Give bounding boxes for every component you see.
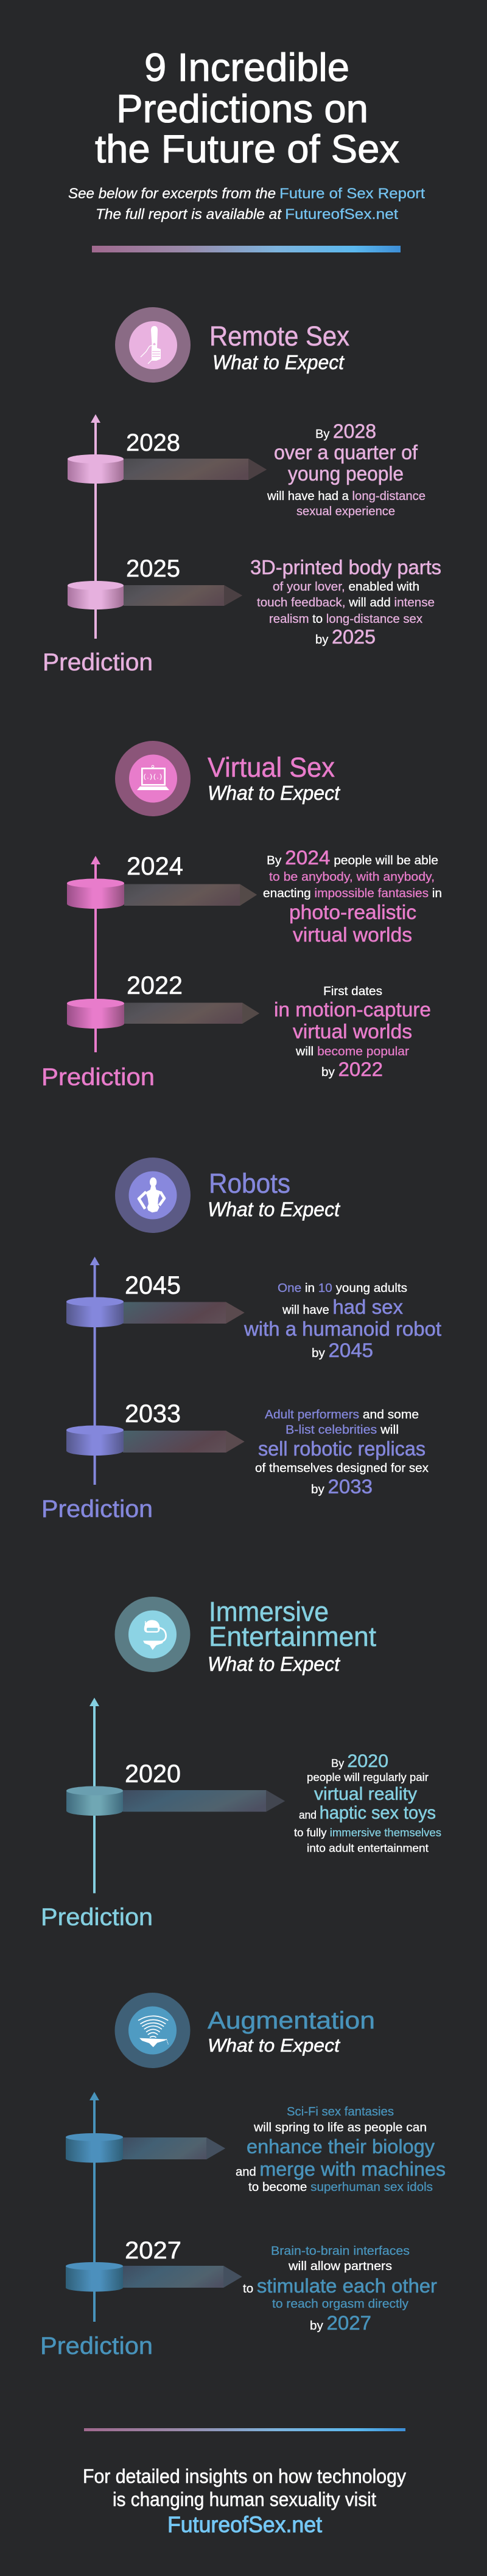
text block: 2020 prediction: to fully immersive themselves	[294, 1827, 441, 1839]
heading: augmentation: Augmentation	[208, 2007, 375, 2034]
title: Predictions on	[116, 86, 368, 131]
panel: immersive entertainment	[41, 1596, 441, 1931]
intro text: Future of Sex Report	[279, 186, 425, 202]
subheading: What to Expect	[212, 351, 345, 373]
text block: 2028 prediction: over a quarter of	[274, 441, 418, 463]
text block: 2045 prediction	[244, 1282, 441, 1361]
text block: 2027 prediction: to stimulate each other	[243, 2275, 437, 2297]
icon: laptop	[115, 741, 191, 816]
intro text: FutureofSex.net	[285, 206, 398, 223]
text block: 2033 prediction: of themselves designed for sex	[255, 1462, 429, 1475]
panel: augmentation	[40, 1993, 446, 2359]
subheading: What to Expect	[208, 782, 341, 804]
marker: 2024: 2024	[127, 852, 183, 880]
marker: 2045	[66, 1271, 245, 1327]
text block: 2020 prediction: and haptic sex toys	[299, 1803, 436, 1823]
arrow: timeline axis	[91, 414, 100, 639]
marker: 2027: 2027	[125, 2237, 181, 2264]
heading: immersive entertainment	[209, 1596, 376, 1652]
title: 9 Incredible	[144, 45, 349, 89]
text block: 2025 prediction: touch feedback, will add intense	[257, 596, 435, 609]
text block: 2025 prediction	[250, 556, 441, 648]
text block: 2027 prediction: will allow partners	[288, 2260, 392, 2273]
panel: virtual sex	[41, 741, 442, 1091]
marker: 2022	[67, 971, 259, 1029]
marker: 2025: 2025	[126, 555, 180, 582]
text block: 2022 prediction: in motion-capture	[274, 998, 431, 1021]
marker: 2022: 2022	[127, 971, 183, 999]
intro text	[68, 186, 425, 223]
axis label: Prediction	[41, 1904, 153, 1931]
footer call to action: For detailed insights on how technology	[83, 2465, 406, 2487]
text block: 2022 prediction: First dates	[323, 985, 382, 998]
text block: 2027 prediction: by 2027	[310, 2312, 371, 2334]
text block: biology prediction: and merge with machines	[236, 2158, 446, 2180]
text block: 2022 prediction	[274, 985, 431, 1080]
marker: 2025	[68, 555, 242, 609]
text block: 2028 prediction: will have had a long-distance	[267, 490, 426, 503]
text block: 2033 prediction	[255, 1408, 429, 1498]
text block: 2020 prediction: By 2020	[331, 1751, 388, 1771]
text block: 2024 prediction	[263, 847, 442, 946]
text block: 2033 prediction: B-list celebrities will	[286, 1423, 399, 1437]
axis label: Prediction	[41, 1496, 153, 1522]
marker: 2028	[68, 429, 267, 484]
axis label: Prediction	[41, 1064, 155, 1091]
subheading: What to Expect	[208, 1198, 341, 1220]
text block: 2020 prediction: virtual reality	[314, 1784, 417, 1804]
text block: 2045 prediction: will have had sex	[282, 1296, 403, 1318]
text block: 2020 prediction: into adult entertainment	[307, 1842, 429, 1854]
text block: 2025 prediction: 3D-printed body parts	[250, 556, 441, 578]
footer call to action: is changing human sexuality visit	[113, 2488, 376, 2510]
text block: 2033 prediction: by 2033	[311, 1476, 373, 1498]
heading: remote sex: Remote Sex	[209, 321, 349, 352]
intro text: See below for excerpts from the	[68, 186, 276, 202]
text block: 2024 prediction: photo-realistic	[289, 901, 416, 923]
icon: remote vibrator in hand	[115, 307, 191, 383]
marker: 2028: 2028	[126, 429, 180, 456]
text block: biology prediction: enhance their biology	[247, 2136, 435, 2158]
text block: 2027 prediction	[243, 2244, 437, 2334]
icon: humanoid robot	[115, 1158, 191, 1233]
arrow: timeline axis	[90, 1257, 100, 1485]
text block: 2020 prediction	[294, 1751, 441, 1854]
text block: 2028 prediction: By 2028	[315, 420, 376, 442]
marker: 2024	[67, 852, 257, 909]
text block: 2045 prediction: One in 10 young adults	[278, 1282, 407, 1295]
subheading: What to Expect	[208, 1653, 341, 1675]
axis label: Prediction	[40, 2333, 153, 2359]
heading: immersive entertainment: Entertainment	[209, 1621, 376, 1652]
marker: 2027	[66, 2237, 242, 2291]
text block: 2025 prediction: by 2025	[315, 626, 376, 648]
text block: 2024 prediction: to be anybody, with anybody,	[269, 870, 435, 884]
subheading: What to Expect	[208, 2035, 340, 2056]
marker: 2020	[66, 1759, 285, 1816]
text block: 2022 prediction: will become popular	[295, 1045, 409, 1058]
text block: biology prediction: Sci-Fi sex fantasies	[287, 2105, 394, 2119]
text block: 2027 prediction: to reach orgasm directly	[272, 2297, 408, 2311]
marker: first prediction	[66, 2133, 225, 2162]
text block: 2024 prediction: enacting impossible fantasies in	[263, 887, 442, 900]
icon: laptop: (.)(.)	[144, 774, 162, 780]
text block: 2028 prediction: young people	[288, 462, 404, 485]
text block: 2025 prediction: of your lover, enabled with	[273, 580, 419, 594]
panel: remote sex	[43, 307, 441, 676]
text block: 2033 prediction: Adult performers and some	[265, 1408, 419, 1422]
marker: 2033: 2033	[125, 1399, 181, 1428]
icon: goggles and underwear	[114, 1597, 190, 1672]
heading: immersive entertainment: Immersive	[209, 1596, 329, 1627]
text block: 2020 prediction: people will regularly pair	[307, 1771, 429, 1783]
text block: biology prediction: to become superhuman sex idols	[248, 2181, 433, 2194]
text block: 2045 prediction: by 2045	[312, 1339, 373, 1361]
text block: 2033 prediction: sell robotic replicas	[258, 1437, 426, 1460]
text block: 2027 prediction: Brain-to-brain interfaces	[271, 2244, 410, 2258]
title	[95, 45, 399, 171]
text block: 2028 prediction	[267, 420, 426, 518]
text block: 2045 prediction: with a humanoid robot	[244, 1318, 441, 1340]
footer call to action: FutureofSex.net	[167, 2512, 323, 2537]
intro text: The full report is available at	[96, 206, 282, 223]
footer call to action	[83, 2465, 406, 2537]
text block: 2022 prediction: virtual worlds	[293, 1020, 412, 1043]
heading: virtual sex: Virtual Sex	[208, 752, 335, 783]
text block: 2022 prediction: by 2022	[321, 1058, 383, 1080]
text block: 2028 prediction: sexual experience	[296, 505, 395, 518]
title: the Future of Sex	[95, 127, 399, 171]
text block: 2024 prediction: By 2024 people will be able	[267, 847, 438, 869]
marker: 2045: 2045	[125, 1271, 181, 1299]
arrow: timeline axis	[89, 1698, 99, 1893]
text block: biology prediction: will spring to life as people can	[253, 2121, 427, 2134]
marker: 2020: 2020	[125, 1759, 181, 1788]
arrow: timeline axis	[89, 2092, 99, 2322]
text block: biology prediction	[236, 2105, 446, 2194]
text block: 2025 prediction: realism to long-distance sex	[269, 613, 422, 626]
arrow: timeline axis	[91, 856, 100, 1052]
marker: 2033	[66, 1399, 245, 1456]
icon: wifi and underwear	[114, 1993, 190, 2068]
panel: robots	[41, 1158, 441, 1522]
heading: robots: Robots	[209, 1168, 290, 1199]
text block: 2024 prediction: virtual worlds	[293, 923, 412, 946]
axis label: Prediction	[43, 649, 153, 676]
